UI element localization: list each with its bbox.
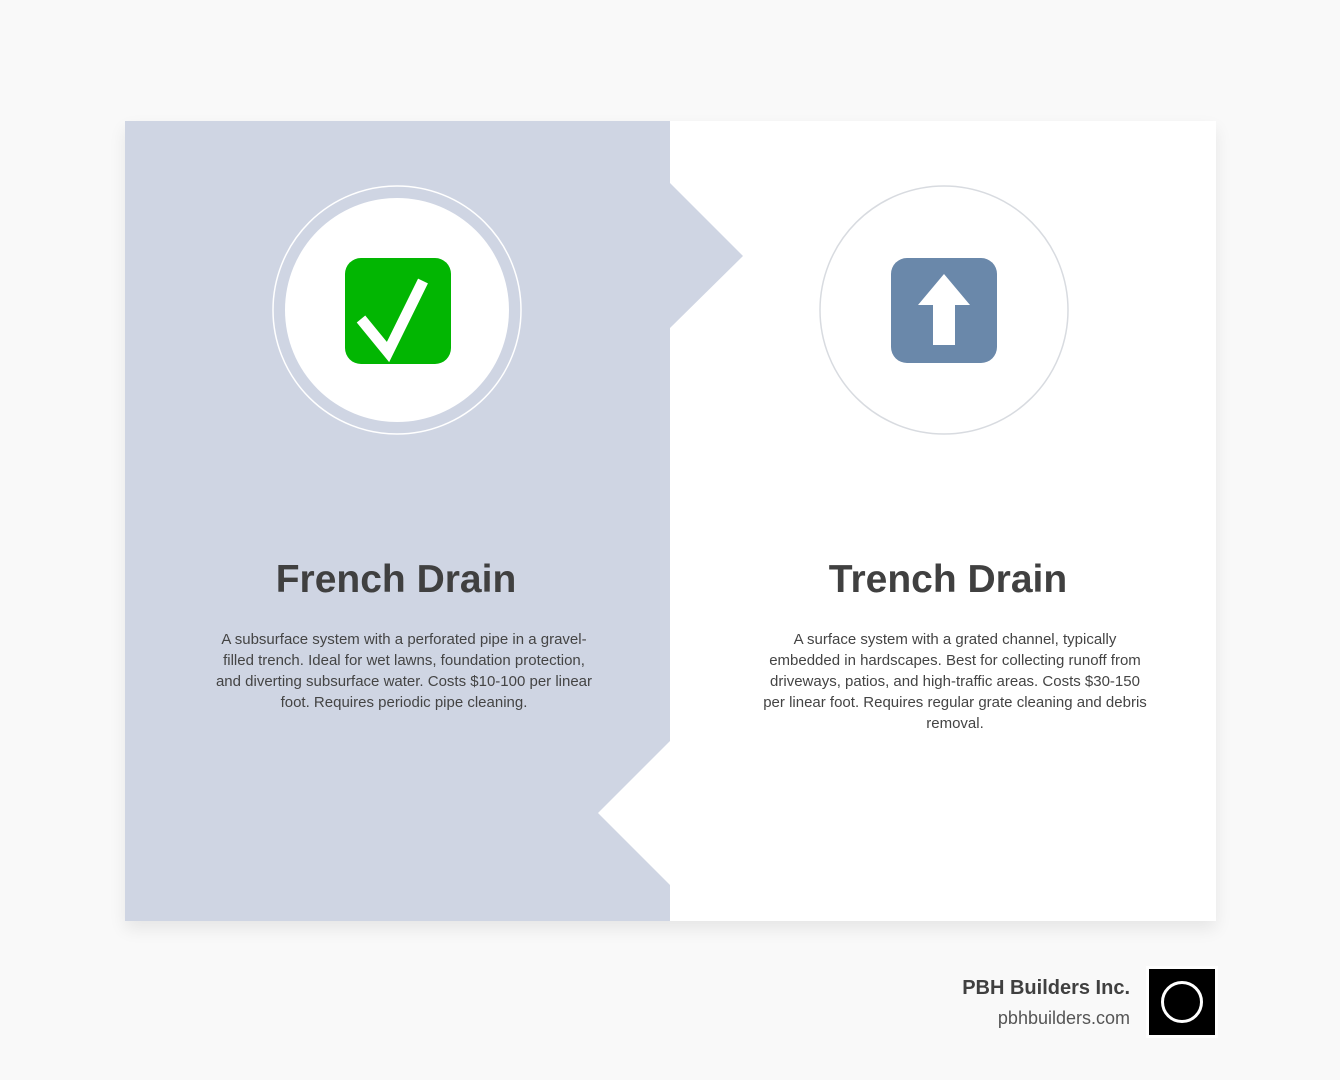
title: Trench Drain: Trench Drain <box>829 558 1067 601</box>
footer: company: pbhbuilders.com <box>998 1008 1130 1028</box>
text: French Drain description: A subsurface system with a perforated pipe in a gravel-filled trench. Ideal for wet lawns, foundation protection, and diverting subsurface water. Costs $10-100 per linear foot. Requires periodic pipe cleaning. <box>216 631 592 711</box>
icon: right circle <box>820 186 1068 434</box>
text: Trench Drain description: A surface system with a grated channel, typically embedded in hardscapes. Best for collecting runoff from driveways, patios, and high-traffic areas. Costs $30-150 per linear foot. Requires regular grate cleaning and debris removal. <box>763 631 1147 732</box>
card <box>125 121 1216 921</box>
panel: left shape <box>125 121 1069 921</box>
icon: logo <box>1146 966 1218 1038</box>
footer: company <box>962 977 1130 1028</box>
icon: left circle <box>273 186 521 434</box>
title: French Drain: French Drain <box>276 558 516 601</box>
footer: company: PBH Builders Inc. <box>962 977 1130 999</box>
